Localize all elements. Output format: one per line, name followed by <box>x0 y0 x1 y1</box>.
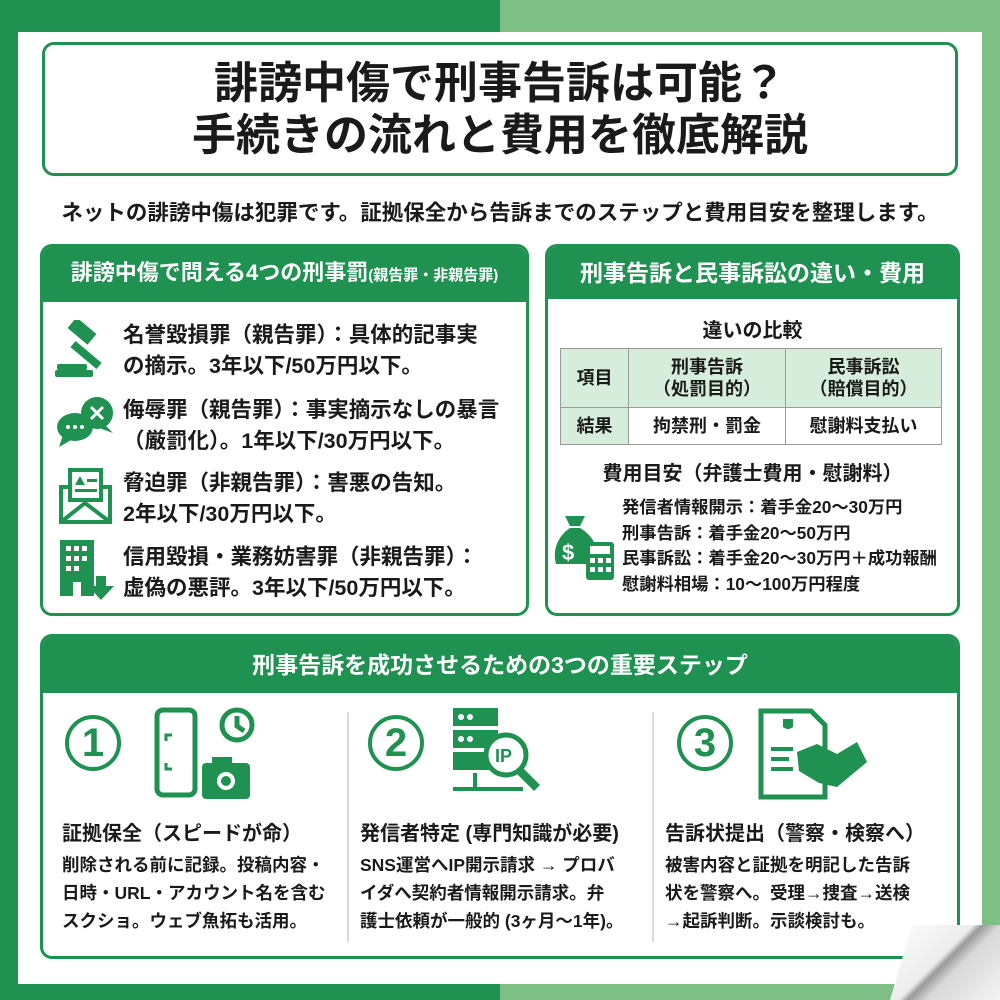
text: insult: （厳罰化）。1年以下/30万円以下。 <box>123 429 455 453</box>
panel: crimes <box>40 244 529 616</box>
icon: envelope <box>59 468 112 524</box>
panel heading: steps <box>43 637 957 693</box>
number 3: 3 <box>694 721 716 765</box>
icon: money bag and calculator: $ <box>562 540 574 565</box>
comparison table: 結果 <box>576 416 612 436</box>
panel heading: crimes <box>43 247 526 302</box>
step 2 text: SNS運営へIP開示請求 → プロバ <box>360 855 615 875</box>
icon: gavel <box>55 320 102 377</box>
step 1 text: スクショ。ウェブ魚拓も活用。 <box>62 911 307 931</box>
panel heading: crimes: 誹謗中傷で問える4つの刑事罰(親告罪・非親告罪) <box>71 260 498 285</box>
text: defamation: の摘示。3年以下/50万円以下。 <box>123 354 423 378</box>
icon: document and handshake <box>758 708 867 800</box>
step 1 text: 日時・URL・アカウント名を含む <box>62 883 325 903</box>
heading: comparison: 違いの比較 <box>702 320 802 342</box>
panel: steps <box>40 634 960 959</box>
text: business obstruction: 信用毀損・業務妨害罪（非親告罪）： <box>123 545 478 569</box>
number 1 <box>65 715 121 771</box>
step 1 text: 削除される前に記録。投稿内容・ <box>62 855 324 875</box>
cost list: 民事訴訟：着手金20～30万円＋成功報酬 <box>622 548 937 568</box>
cost list: 刑事告訴：着手金20～50万円 <box>622 522 851 542</box>
step 2 <box>360 708 623 931</box>
title box <box>42 42 958 176</box>
number 2: 2 <box>385 721 407 765</box>
icon: speech bubbles <box>57 397 113 447</box>
comparison table: 刑事告訴 <box>671 357 743 377</box>
icon: building with down arrow <box>60 540 114 600</box>
step 3 text: →起訴判断。示談検討も。 <box>665 911 875 931</box>
title box: 誹謗中傷で刑事告訴は可能？ <box>214 59 786 108</box>
number 2 <box>368 715 424 771</box>
step 3 text: 状を警察へ。受理→捜査→送検 <box>665 883 910 903</box>
text: business obstruction: 虚偽の悪評。3年以下/50万円以下。 <box>123 576 466 600</box>
cost list: 慰謝料相場：10～100万円程度 <box>622 574 860 594</box>
icon: server with IP magnifier: IP <box>495 746 512 766</box>
step 3 text: 被害内容と証拠を明記した告訴 <box>665 855 910 875</box>
step 3 text <box>665 855 910 931</box>
step 1 <box>62 708 325 931</box>
comparison table: （処罰目的） <box>653 379 761 399</box>
text: intimidation: 脅迫罪（非親告罪）：害悪の告知。 <box>123 471 456 495</box>
icon: server with IP magnifier <box>453 708 540 791</box>
panel heading: comparison: 刑事告訴と民事訴訟の違い・費用 <box>580 260 925 286</box>
icon: phone camera clock <box>154 708 254 799</box>
number 3 <box>677 715 733 771</box>
comparison table <box>560 348 942 445</box>
step 2 text <box>360 855 623 931</box>
text: insult <box>123 398 499 453</box>
panel: criminal vs civil <box>545 244 960 616</box>
step 1 title: 証拠保全（スピードが命） <box>62 823 302 845</box>
step 3 <box>665 708 925 931</box>
step 3 title: 告訴状提出（警察・検察へ） <box>665 823 925 845</box>
number 1: 1 <box>82 721 104 765</box>
step 2 text: イダへ契約者情報開示請求。弁 <box>360 883 604 903</box>
icon: money bag and calculator <box>554 516 614 580</box>
comparison table: 慰謝料支払い <box>810 416 918 436</box>
comparison table: 民事訴訟 <box>828 357 900 377</box>
step 2 text: 護士依頼が一般的 (3ヶ月～1年)。 <box>360 911 623 931</box>
text: intimidation: 2年以下/30万円以下。 <box>123 502 337 526</box>
step 1 text <box>62 855 325 931</box>
comparison table: 項目 <box>576 368 612 388</box>
text: business obstruction <box>123 545 478 600</box>
comparison table: （賠償目的） <box>810 379 918 399</box>
title box: 手続きの流れと費用を徹底解説 <box>192 111 808 160</box>
panel heading: comparison <box>548 247 957 299</box>
step 2 title: 発信者特定 (専門知識が必要) <box>360 823 619 845</box>
text: intimidation <box>123 471 456 526</box>
text: defamation <box>123 323 478 378</box>
panel heading: steps: 刑事告訴を成功させるための3つの重要ステップ <box>252 652 748 678</box>
page curl corner <box>890 925 1000 1000</box>
heading: cost: 費用目安（弁護士費用・慰謝料） <box>602 463 902 485</box>
comparison table: 拘禁刑・罰金 <box>653 416 761 436</box>
text: defamation: 名誉毀損罪（親告罪）：具体的記事実 <box>123 323 478 347</box>
cost list <box>622 497 937 594</box>
text: insult: 侮辱罪（親告罪）：事実摘示なしの暴言 <box>123 398 499 422</box>
cost list: 発信者情報開示：着手金20～30万円 <box>622 497 902 517</box>
subtitle: ネットの誹謗中傷は犯罪です。証拠保全から告訴までのステップと費用目安を整理します。 <box>61 201 939 225</box>
